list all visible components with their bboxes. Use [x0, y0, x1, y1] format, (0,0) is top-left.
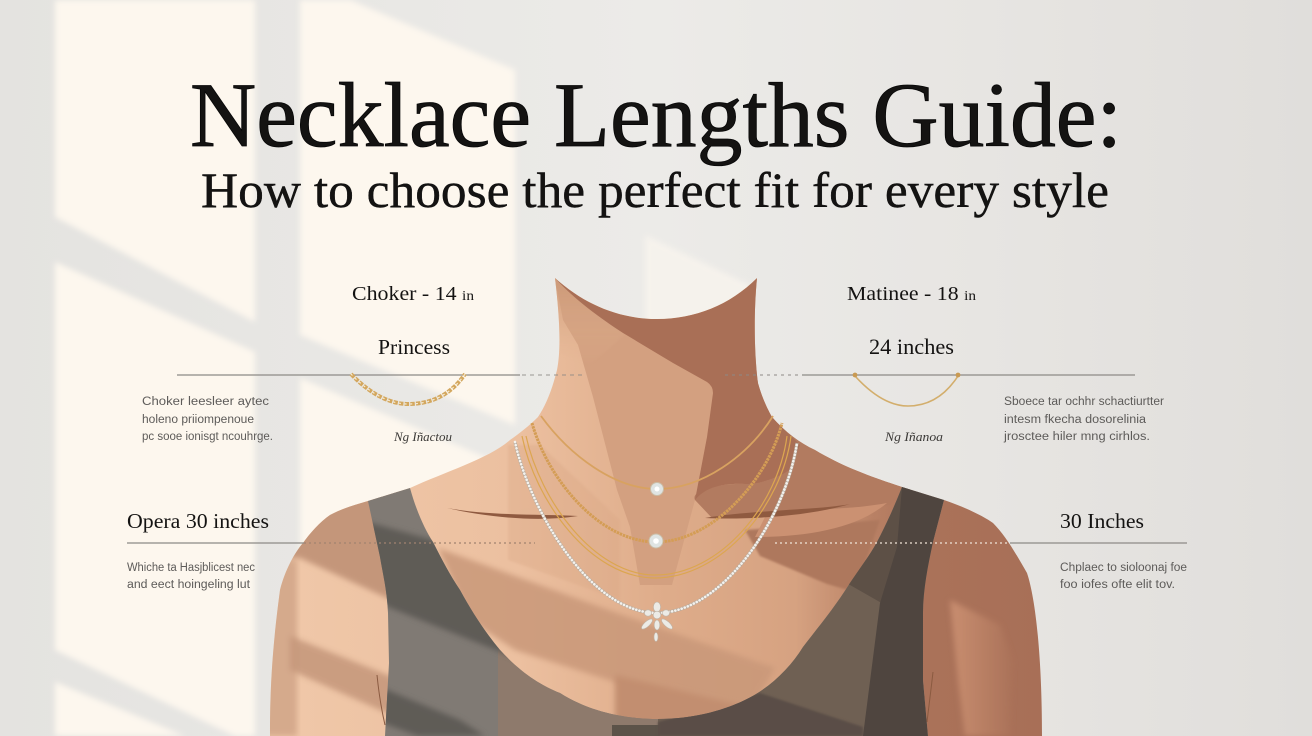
- neck dark side: [555, 278, 800, 500]
- subtitle: How to choose the perfect fit for every style: [201, 162, 1109, 218]
- caption: left description: Choker leesleer aytec: [142, 396, 269, 408]
- caption: lower right: foo iofes ofte elit tov.: [1060, 579, 1175, 591]
- guide line: upper left: [177, 374, 586, 376]
- tank colour panels: [498, 480, 910, 736]
- caption: lower right: Chplaec to sioloonaj foe: [1060, 562, 1187, 574]
- guide line: lower left: [127, 542, 535, 544]
- caption: right description: Sboece tar ochhr schactiurtter: [1004, 396, 1164, 408]
- mini chain: thin curve: [853, 373, 960, 406]
- necklace 3: double gold chain: [522, 436, 791, 578]
- label: choker: Choker - 14 in: [352, 283, 474, 305]
- collarbones: [447, 504, 850, 519]
- caption: left description: holeno priiompenoue: [142, 414, 254, 426]
- chest shadow band: [438, 445, 780, 730]
- necklace 1: fine gold with solitaire: [541, 416, 773, 496]
- title: Necklace Lengths Guide:: [190, 64, 1122, 166]
- script caption right: Ng Iñanoa: [884, 430, 943, 444]
- tank top: [360, 480, 944, 736]
- caption: lower left: Whiche ta Hasjblicest nec: [127, 562, 255, 574]
- caption: right description: jrosctee hiler mng cirhlos.: [1003, 431, 1150, 443]
- label: 30 inches: 30 Inches: [1060, 509, 1144, 533]
- guide line: lower right: [775, 542, 1187, 544]
- caption: right description: [1003, 396, 1164, 443]
- caption: lower right: [1060, 562, 1187, 591]
- caption: lower left: [127, 562, 255, 591]
- caption: right description: intesm fkecha dosorelinia: [1004, 414, 1147, 426]
- script caption left: Ng Iñactou: [393, 430, 452, 444]
- necklace 4: diamond tennis with flower pendant: [515, 442, 797, 642]
- caption: left description: [142, 396, 273, 443]
- label: princess: Princess: [378, 335, 450, 359]
- arm creases: [377, 672, 933, 725]
- label: opera: Opera 30 inches: [127, 509, 269, 533]
- tank shadows: [360, 520, 863, 736]
- right arm light: [949, 600, 1000, 736]
- figure: neck and shoulders: [260, 276, 1042, 736]
- label: matinee: Matinee - 18 in: [847, 283, 976, 305]
- neck tones: [550, 276, 713, 585]
- caption: lower left: and eect hoingeling lut: [127, 579, 251, 591]
- necklace 2: rope gold with solitaire: [532, 423, 782, 548]
- right chest shadows: [694, 417, 905, 592]
- label: 24 inches: 24 inches: [869, 334, 954, 359]
- mini chain: link chain: [351, 374, 465, 404]
- tank dark right band: [863, 487, 944, 736]
- guide line: upper right: [725, 374, 1135, 376]
- caption: left description: pc sooe ionisgt ncouhrge.: [142, 431, 273, 443]
- left shoulder shadows: [270, 491, 400, 736]
